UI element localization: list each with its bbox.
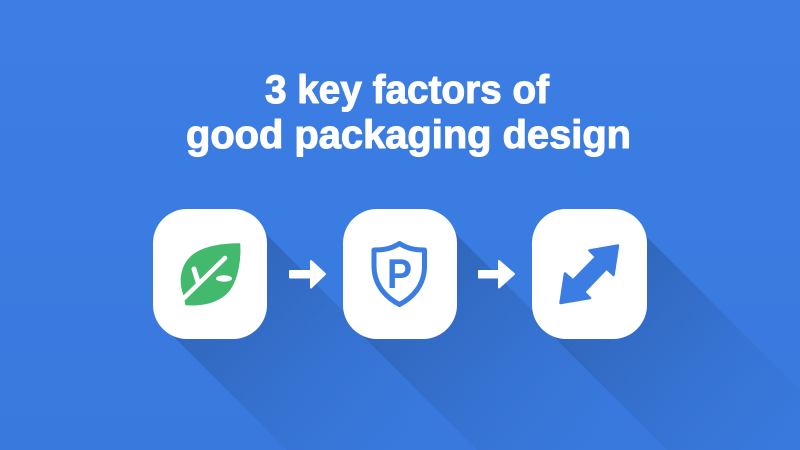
icon: green leaf bbox=[181, 244, 240, 305]
icon: diagonal double arrow bbox=[560, 246, 618, 303]
title: good packaging design bbox=[186, 113, 631, 157]
arrow 1 bbox=[290, 261, 325, 288]
icon: shield with letter P: P bbox=[387, 250, 412, 297]
title bbox=[186, 68, 631, 157]
card 1: sustainability leaf bbox=[153, 209, 267, 339]
long shadow: card 3 bbox=[552, 230, 800, 450]
card 2: protection shield bbox=[343, 209, 457, 339]
title: 3 key factors of bbox=[265, 68, 550, 112]
long shadow: card 2 bbox=[362, 228, 687, 450]
long shadow: card 1 bbox=[172, 228, 497, 450]
arrow 2 bbox=[479, 261, 514, 288]
card 3: resize double arrow bbox=[532, 209, 647, 339]
